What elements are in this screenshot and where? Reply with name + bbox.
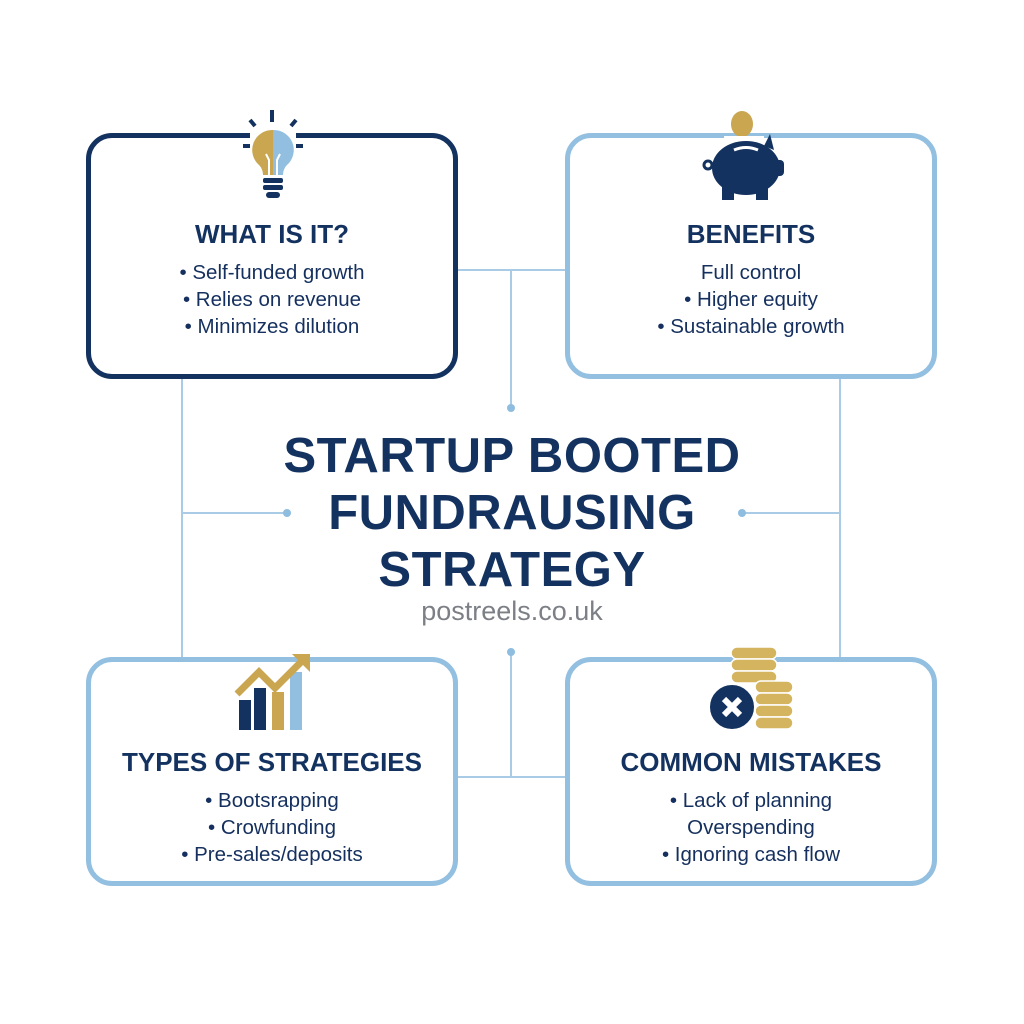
panel: benefits	[565, 133, 937, 379]
heading: what is it: WHAT IS IT?	[195, 219, 349, 249]
list: types: • Bootsrapping	[205, 789, 339, 812]
list: types: • Crowfunding	[208, 816, 336, 839]
list: types: • Pre-sales/deposits	[181, 843, 363, 866]
title: STRATEGY	[378, 543, 646, 597]
list: benefits: • Higher equity	[684, 288, 818, 311]
list: mistakes: • Lack of planning	[670, 789, 832, 812]
panel: common mistakes	[565, 657, 937, 886]
title	[283, 429, 741, 626]
panel: types of strategies	[86, 657, 458, 886]
icon: growth chart	[234, 654, 310, 730]
list: benefits: Full control	[701, 261, 801, 284]
list: what is it: • Self-funded growth	[180, 261, 364, 284]
icon: piggy bank	[702, 111, 784, 200]
icon: coins with x	[710, 648, 792, 729]
panel: what is it	[86, 133, 458, 379]
heading: mistakes: COMMON MISTAKES	[621, 747, 881, 777]
list: mistakes: • Ignoring cash flow	[662, 843, 840, 866]
list: types	[181, 789, 363, 866]
list: mistakes	[662, 789, 840, 866]
title: FUNDRAUSING	[328, 486, 696, 540]
list: benefits	[657, 261, 845, 338]
title: STARTUP BOOTED	[283, 429, 741, 483]
list: mistakes: Overspending	[687, 816, 815, 839]
url: postreels.co.uk	[421, 596, 603, 626]
heading: benefits: BENEFITS	[687, 219, 815, 249]
list: what is it	[180, 261, 364, 338]
list: what is it: • Minimizes dilution	[185, 315, 359, 338]
icon: light bulb	[243, 110, 303, 198]
list: what is it: • Relies on revenue	[183, 288, 361, 311]
heading: types: TYPES OF STRATEGIES	[122, 747, 422, 777]
list: benefits: • Sustainable growth	[657, 315, 845, 338]
